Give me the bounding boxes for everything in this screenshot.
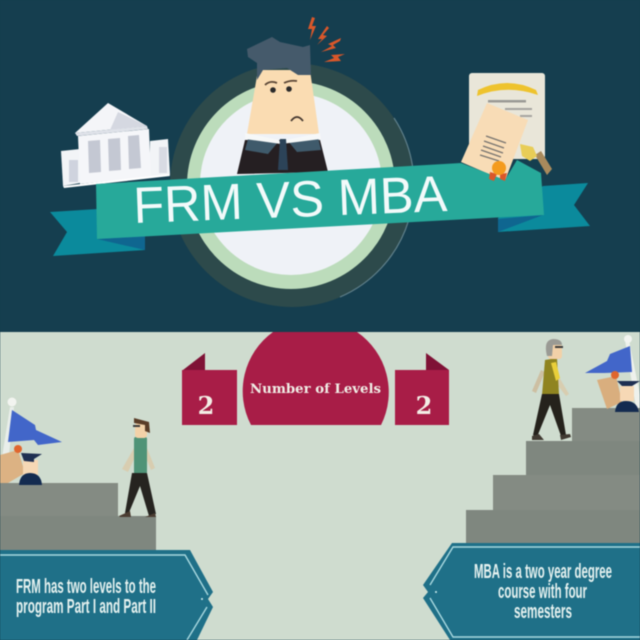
icon: left flag and graduate [0,398,62,485]
icon: bank building [61,103,170,188]
figure: MBA professor walking [532,339,571,440]
callout text: FRM: program Part I and Part II [16,596,156,618]
illustration: businessman [237,37,328,174]
icon: certificate seal [489,161,507,181]
heading: number of levels: Number of Levels [250,382,381,397]
flag: FRM level count: 2 [198,391,214,420]
flag: MBA level count [395,353,449,425]
icon: certificate [461,73,552,181]
right stairs [466,408,640,544]
callout text: FRM: FRM has two levels to the [16,576,156,598]
emblem circle [170,63,414,307]
panel: MBA callout [423,543,640,640]
heading: number of levels [243,332,389,425]
flag: MBA level count: 2 [416,391,432,420]
ribbon: left tail [50,209,145,256]
title: FRM VS MBA [132,165,448,234]
icon: right flag and graduate [585,335,640,412]
icon: stress lightning bolts [308,17,345,62]
callout text: MBA [474,561,612,623]
panel: header background [0,0,640,332]
figure: FRM student walking [119,418,156,517]
panel: lower background [0,332,640,640]
left stairs [0,483,156,550]
callout text: MBA: semesters [514,601,572,623]
panel: FRM callout [0,550,213,640]
title banner [96,160,544,239]
ribbon: right tail [498,183,590,232]
callout text: FRM [16,576,156,618]
flag: FRM level count [182,353,237,425]
